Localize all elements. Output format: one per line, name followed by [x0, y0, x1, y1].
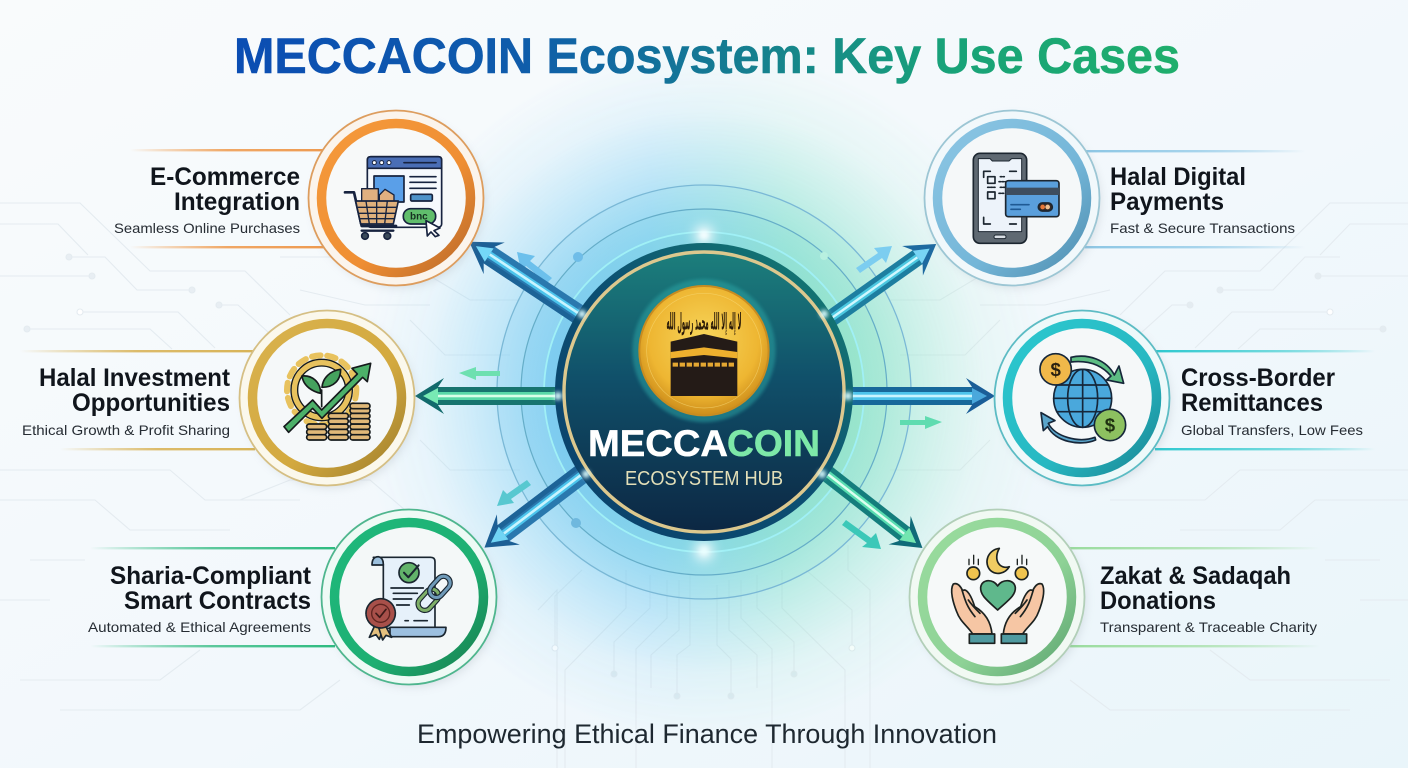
badge rings: [924, 110, 1100, 287]
heading: Integration: [174, 188, 300, 216]
arrow: to zakat donations: [809, 454, 934, 562]
badge rings: [994, 310, 1170, 487]
heading: Smart Contracts: [124, 587, 311, 615]
panel: halal digital payments: [924, 110, 1305, 287]
connector lines: [20, 350, 255, 450]
hub disc: [564, 252, 844, 532]
hub sparkles: [554, 310, 852, 478]
badge rings: [240, 310, 415, 487]
connector lines: [1085, 150, 1305, 248]
arrow: to e-commerce: [459, 226, 601, 338]
hub glow: [404, 79, 996, 704]
heading: E-Commerce: [150, 163, 300, 191]
hub wordmark: MECCA: [588, 423, 728, 464]
concentric hub rings: [497, 185, 911, 599]
heading: [1100, 562, 1291, 615]
heading: Sharia-Compliant: [110, 562, 312, 590]
hub rim: [555, 243, 853, 541]
heading: Zakat & Sadaqah: [1100, 562, 1291, 590]
title: MECCACOIN Ecosystem: Key Use Cases: [234, 28, 1180, 84]
arrow: to halal digital payments: [816, 229, 947, 337]
panel: halal investment opportunities: [20, 310, 415, 487]
heading: Cross-Border: [1181, 364, 1335, 392]
description: Automated & Ethical Agreements: [88, 619, 311, 635]
hub wordmark: [588, 423, 820, 464]
icon: globe with coins: $: [1050, 359, 1061, 380]
heading: Halal Investment: [39, 364, 231, 392]
heading: Payments: [1110, 188, 1224, 216]
badge rings: [308, 110, 484, 287]
icon: globe with coins: $: [1105, 415, 1116, 436]
heading: [150, 163, 300, 216]
icon: contract, chain and seal: [366, 557, 453, 640]
description: Transparent & Traceable Charity: [1100, 619, 1317, 635]
panel: sharia-compliant smart contracts: [88, 510, 497, 686]
kaaba: [671, 334, 737, 396]
heading: Donations: [1100, 587, 1216, 615]
description: Ethical Growth & Profit Sharing: [22, 422, 230, 438]
icon: shopping cart and web store: bnc: [410, 212, 428, 223]
hub subtitle: ECOSYSTEM HUB: [625, 468, 783, 490]
icon: phone qr and card: [973, 153, 1059, 243]
description: Fast & Secure Transactions: [1110, 220, 1295, 236]
icon: globe with coins: [1040, 354, 1126, 443]
icon: giving hands with heart: [952, 548, 1044, 643]
arrow: to halal investment: [415, 378, 566, 414]
central hub: [554, 243, 853, 541]
connector lines: [1070, 547, 1320, 647]
arrow: to sharia contracts: [473, 451, 603, 563]
footer tagline: Empowering Ethical Finance Through Innovation: [417, 719, 997, 749]
heading: [39, 364, 231, 417]
connector lines: [130, 149, 325, 248]
background circuit traces: [0, 203, 1408, 768]
connector lines: [90, 547, 335, 647]
heading: [1181, 364, 1335, 417]
hub wordmark: COIN: [727, 423, 820, 464]
heading: [1110, 163, 1246, 216]
small data arrows: [459, 246, 942, 549]
heading: Opportunities: [72, 389, 230, 417]
icon: shopping cart and web store: [345, 157, 442, 239]
panel: cross-border remittances: [994, 310, 1375, 487]
heading: [110, 562, 312, 615]
badge rings: [910, 510, 1085, 686]
badge rings: [322, 510, 497, 686]
arrow: to cross-border remittances: [842, 378, 995, 414]
icon: growth gear and coins: [284, 355, 371, 440]
heading: Halal Digital: [1110, 163, 1246, 191]
gold coin with kaaba: [632, 279, 776, 422]
panel: zakat and sadaqah donations: [910, 510, 1320, 686]
connector lines: [1155, 350, 1375, 450]
central hub: لا إله إلا الله محمد رسول الله: [666, 307, 741, 336]
heading: Remittances: [1181, 389, 1323, 417]
panel: e-commerce integration: [114, 110, 484, 287]
description: Global Transfers, Low Fees: [1181, 422, 1363, 438]
description: Seamless Online Purchases: [114, 220, 300, 236]
